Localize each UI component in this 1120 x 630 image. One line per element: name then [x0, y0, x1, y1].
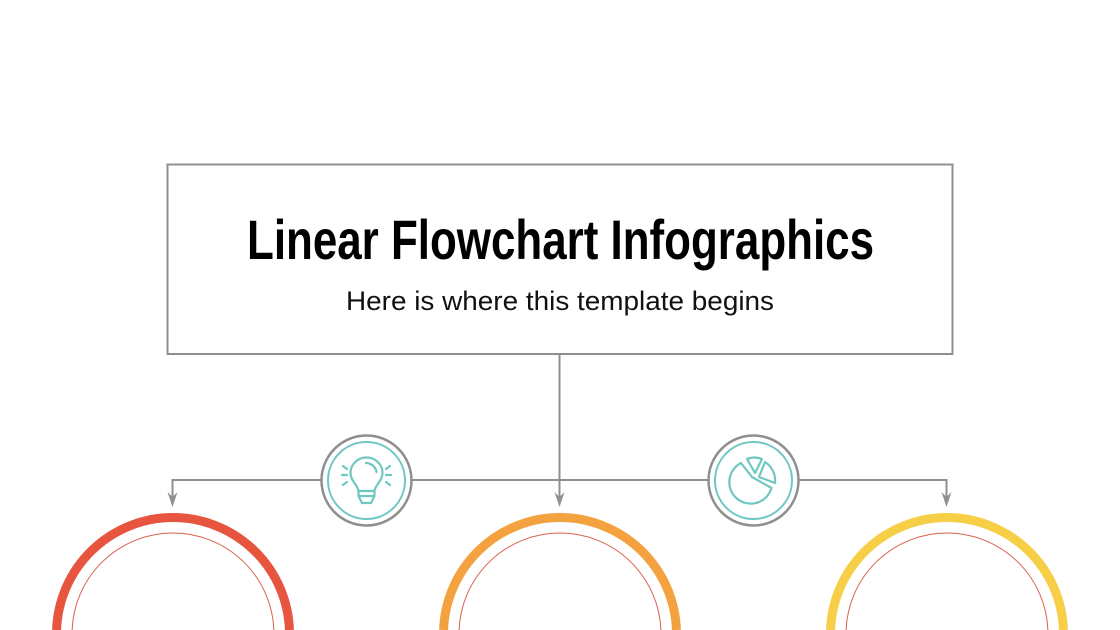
subtitle: Here is where this template begins	[346, 286, 774, 316]
icon: light bulb	[342, 458, 391, 503]
title box	[168, 164, 952, 354]
circle: red	[57, 518, 289, 630]
connector lines	[172, 354, 946, 504]
icon badge: light bulb	[322, 436, 412, 526]
title: Linear Flowchart Infographics	[247, 208, 874, 271]
icon badge: pie chart	[708, 436, 798, 526]
circle: yellow	[831, 518, 1063, 630]
arrowheads	[168, 492, 952, 507]
circle: orange	[444, 518, 676, 630]
icon: pie chart	[729, 458, 775, 504]
